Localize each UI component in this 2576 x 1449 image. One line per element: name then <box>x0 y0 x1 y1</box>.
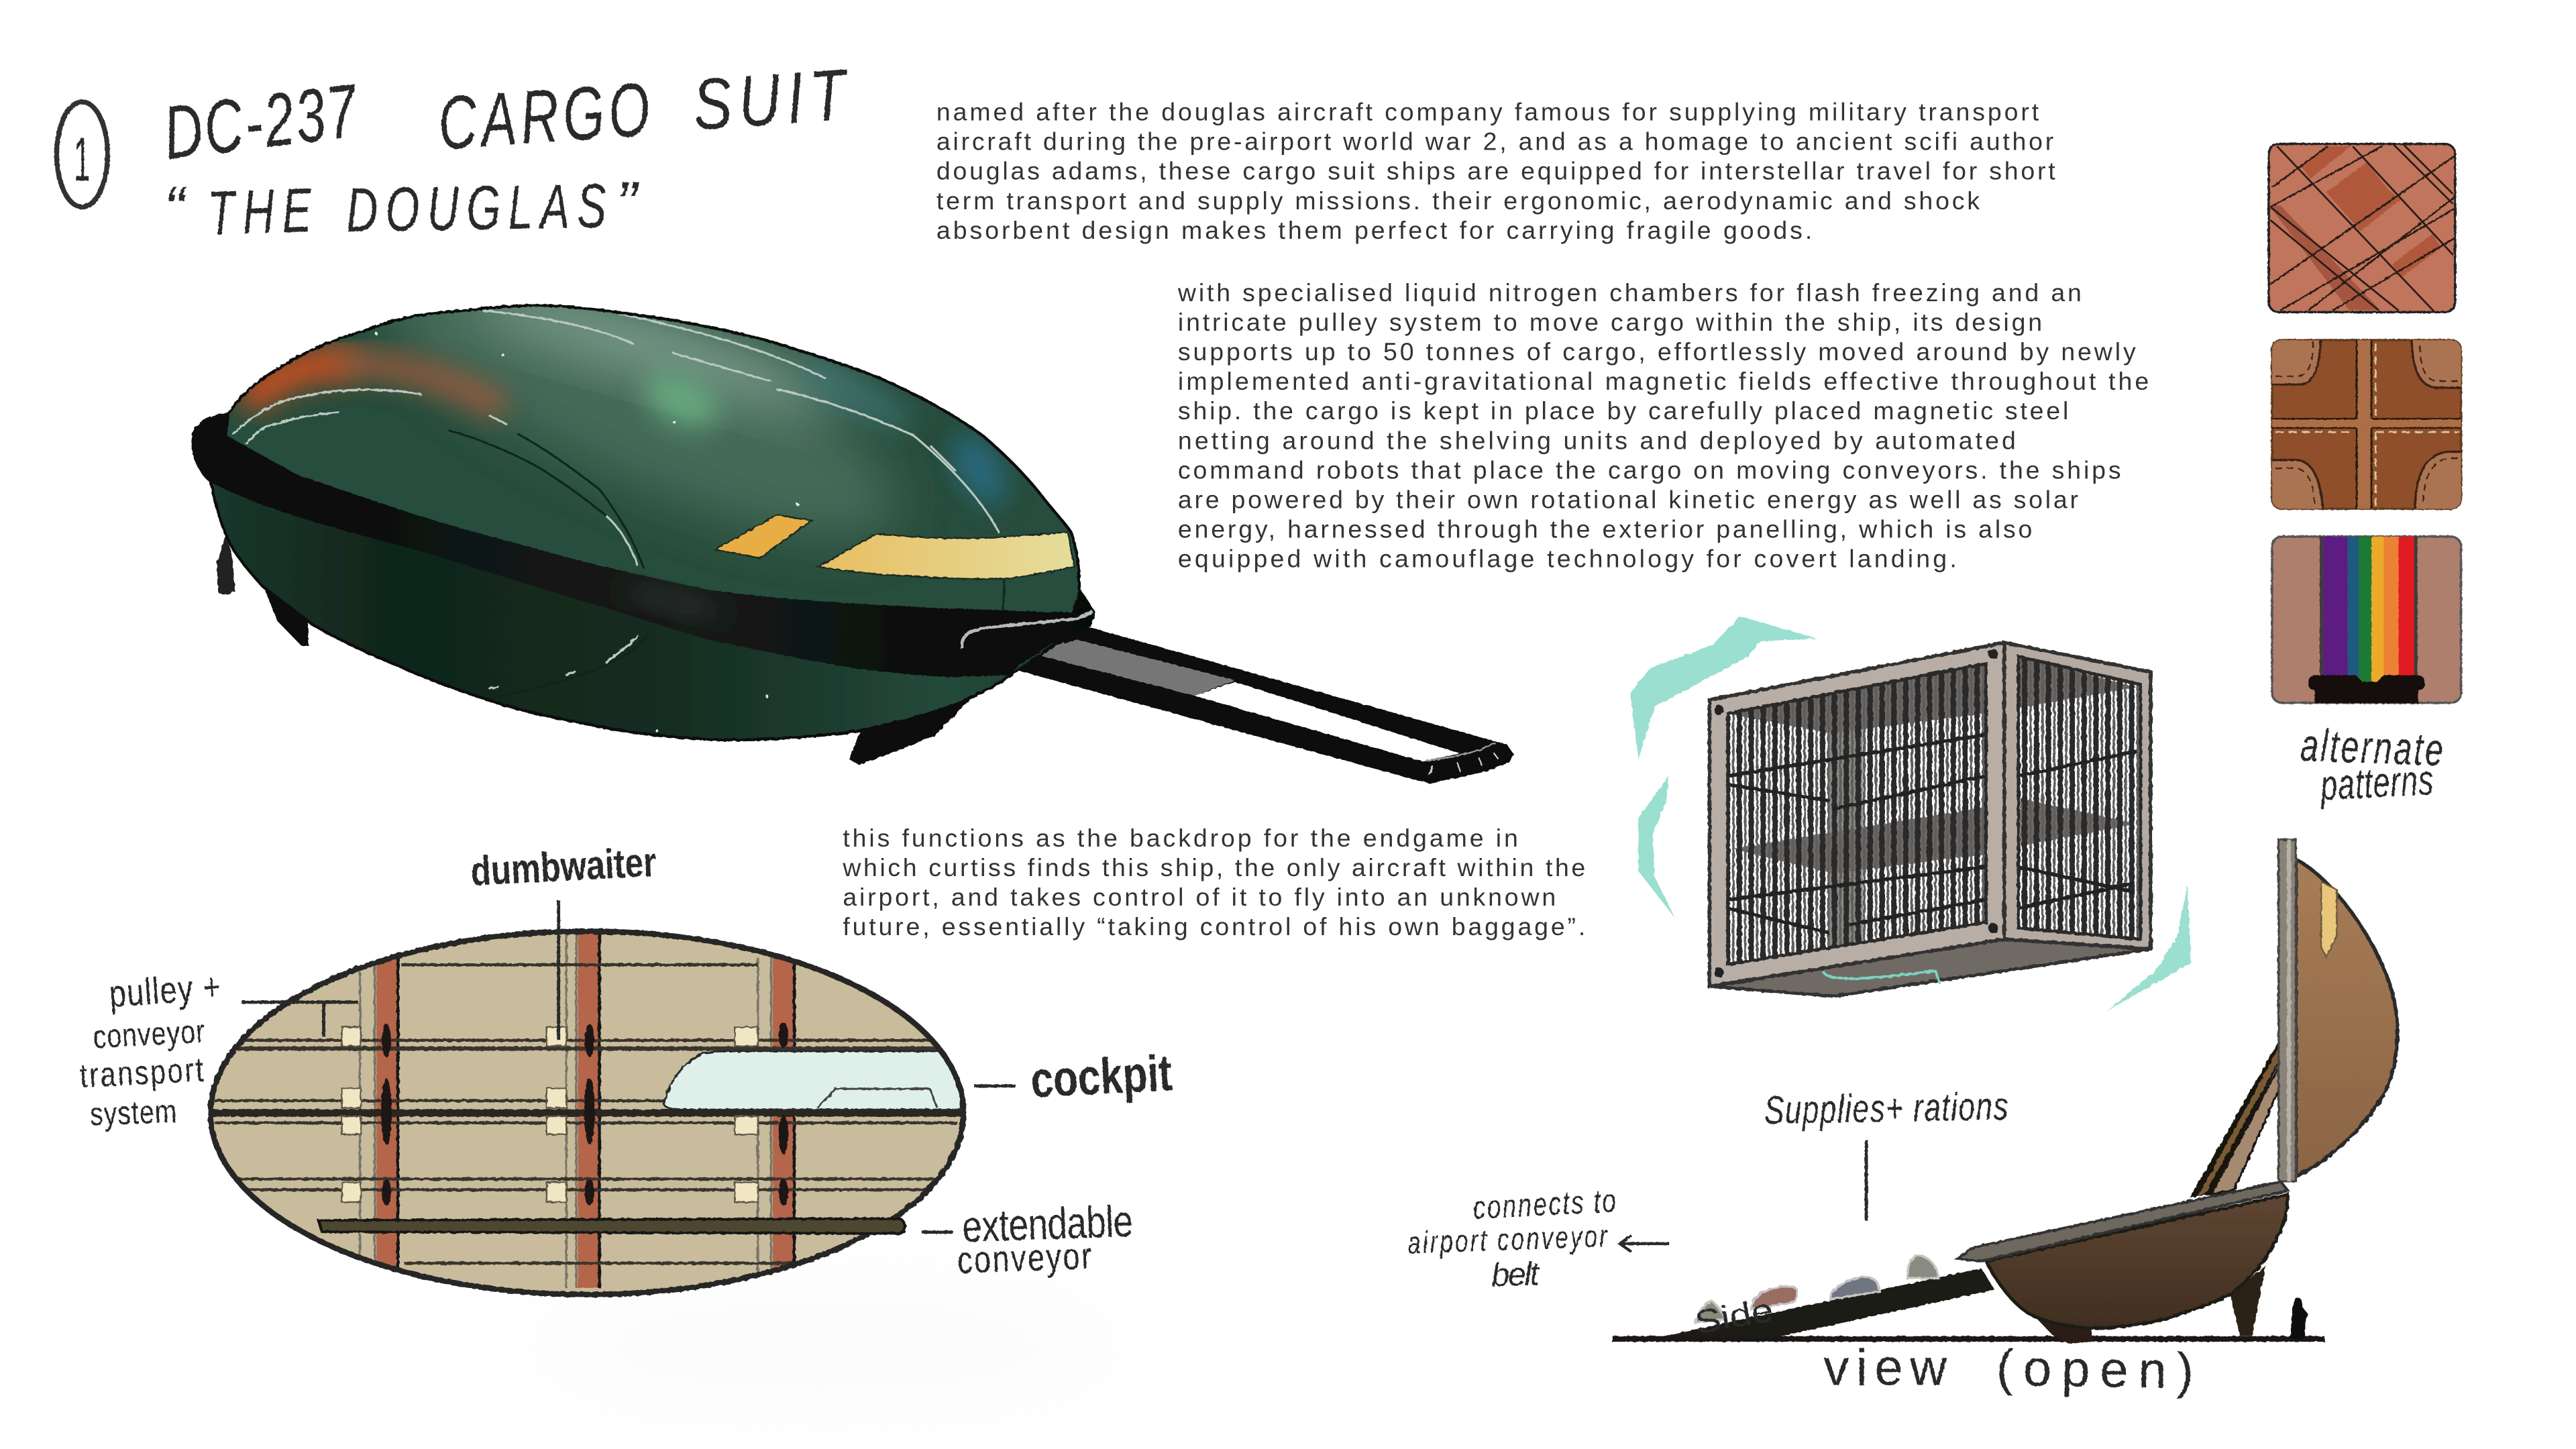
text block: design and cargo systems: supports up to 50 tonnes of cargo, effortlessly moved around by newly <box>1178 337 2136 366</box>
label: alternate patterns: patterns <box>2318 755 2434 810</box>
ship body <box>212 306 1079 739</box>
text block: origin of the name: douglas adams, these cargo suit ships are equipped for interstellar travel for short <box>936 157 2055 185</box>
text block: endgame backdrop: future, essentially “taking control of his own baggage”. <box>843 912 1585 941</box>
title: DC-237 cargo suit "the douglas": DOUGLAS <box>345 171 606 246</box>
lid strut <box>2190 1038 2286 1197</box>
cage bolts <box>1714 649 1998 977</box>
text block: design and cargo systems: energy, harnessed through the exterior panelling, which is also <box>1178 515 2032 543</box>
label: pulley + conveyor transport system: system <box>89 1093 177 1133</box>
text block: origin of the name: absorbent design makes them perfect for carrying fragile goods. <box>936 216 1812 244</box>
labels: cross-section annotations <box>79 839 1173 1281</box>
lower hull <box>1986 1194 2288 1328</box>
cargo supplies <box>1695 1255 1939 1322</box>
label: dumbwaiter: dumbwaiter <box>470 839 657 894</box>
ship yellow window <box>716 515 812 558</box>
ship outline <box>207 305 1079 740</box>
section extendable conveyor <box>319 1219 905 1234</box>
pattern swatch: stitched leather <box>2267 337 2466 511</box>
title: DC-237 cargo suit "the douglas": CARGO <box>435 66 653 166</box>
label: side view (open) <box>1692 1292 2194 1400</box>
label: connects to airport conveyor belt: connects to <box>1472 1183 1617 1226</box>
icon: person for scale <box>2290 1298 2308 1339</box>
text block: endgame backdrop <box>842 824 1585 941</box>
label: pulley + conveyor transport system <box>79 965 222 1133</box>
cage front frame <box>1709 643 2004 986</box>
title: DC-237 cargo suit "the douglas": SUIT <box>690 54 852 146</box>
title: DC-237 cargo suit "the douglas" <box>159 54 852 249</box>
small foot <box>2033 1315 2093 1344</box>
text block: design and cargo systems: intricate pulley system to move cargo within the ship, its design <box>1178 308 2042 336</box>
upper shell <box>2296 859 2398 1176</box>
label: pulley + conveyor transport system: pulley + <box>108 965 222 1015</box>
label: side view (open): Side <box>1692 1292 1776 1341</box>
magnetic field streaks <box>1630 616 2191 1012</box>
hull lid strip <box>1957 1182 2288 1261</box>
support leg <box>2231 1265 2266 1336</box>
label: alternate patterns: alternate <box>2300 718 2444 775</box>
text block: endgame backdrop: this functions as the backdrop for the endgame in <box>843 824 1518 852</box>
title: section number: 1 <box>74 124 91 194</box>
text block: design and cargo systems <box>1177 278 2149 573</box>
label: pulley + conveyor transport system: conveyor <box>92 1014 206 1055</box>
label: cockpit: cockpit <box>1029 1044 1173 1109</box>
label: supplies + rations: Supplies+ rations <box>1764 1085 2008 1133</box>
illustration: side view of the open ship <box>1611 839 2398 1344</box>
section dark pulley slots <box>381 1022 788 1205</box>
pointer line <box>1866 1140 1867 1221</box>
pattern swatch: plaid <box>2269 144 2455 312</box>
label: side view (open): view <box>1823 1339 1947 1396</box>
cage front window <box>1729 665 1985 962</box>
arrow to airport conveyor <box>1620 1236 1669 1252</box>
ship black band <box>191 413 1095 677</box>
ship handle <box>961 626 1514 784</box>
text block: endgame backdrop: which curtiss finds this ship, the only aircraft within the <box>842 853 1585 881</box>
section hull <box>211 931 963 1295</box>
upper shell window <box>2321 882 2337 957</box>
text block: design and cargo systems: command robots that place the cargo on moving conveyors. the ships <box>1178 455 2121 484</box>
illustration: cargo cage with magnetic field <box>1630 616 2191 1012</box>
cage side frame <box>2004 643 2151 949</box>
label: connects to airport conveyor belt <box>1407 1183 1617 1294</box>
title: DC-237 cargo suit "the douglas": DC-237 <box>159 68 364 176</box>
ship connector ring <box>962 611 1093 649</box>
label: alternate patterns <box>2300 718 2444 810</box>
title: section number <box>56 102 107 207</box>
ship fins <box>264 586 976 765</box>
text block: origin of the name: aircraft during the pre-airport world war 2, and as a homage to ancient scifi author <box>936 127 2053 156</box>
text block: origin of the name: term transport and supply missions. their ergonomic, aerodynamic and shock <box>936 186 1980 215</box>
cage underside <box>1709 939 2151 996</box>
text block: design and cargo systems: with specialised liquid nitrogen chambers for flash freezing and an <box>1177 278 2082 307</box>
label: extendable conveyor <box>957 1196 1134 1281</box>
text block: design and cargo systems: ship. the cargo is kept in place by carefully placed magnetic steel <box>1178 396 2068 425</box>
label: side view (open): (open) <box>1996 1340 2194 1400</box>
illustration: green cargo ship with extended handle <box>191 303 1515 784</box>
label: pulley + conveyor transport system: transport <box>79 1050 205 1095</box>
section cream pulleys <box>342 1027 758 1202</box>
label: extendable conveyor: extendable <box>961 1196 1134 1252</box>
cage side window <box>2019 658 2140 938</box>
text block: design and cargo systems: are powered by their own rotational kinetic energy as well as solar <box>1178 485 2078 513</box>
section red columns <box>376 933 794 1288</box>
text block: design and cargo systems: netting around the shelving units and deployed by automated <box>1178 426 2016 454</box>
diagram: internal layout cross-section <box>207 928 967 1298</box>
label: connects to airport conveyor belt: airport conveyor <box>1407 1218 1609 1260</box>
title: DC-237 cargo suit "the douglas": “ <box>163 173 188 244</box>
cargo ramp <box>1662 1269 1994 1338</box>
pointer lines <box>241 900 1015 1232</box>
labels: side view annotations <box>1407 1085 2194 1400</box>
ship yellow stripe <box>818 532 1075 579</box>
text block: endgame backdrop: airport, and takes control of it to fly into an unknown <box>843 883 1556 911</box>
title: DC-237 cargo suit "the douglas": ” <box>616 169 639 239</box>
section cockpit <box>664 1051 974 1110</box>
icon: tiny person for scale <box>217 535 235 595</box>
ground line <box>1611 1338 2324 1340</box>
text block: design and cargo systems: equipped with camouflage technology for covert landing. <box>1178 545 1957 573</box>
shell edge panel <box>2279 839 2296 1181</box>
label: connects to airport conveyor belt: belt <box>1491 1256 1541 1294</box>
text block: design and cargo systems: implemented anti-gravitational magnetic fields effective throughout the <box>1178 367 2149 395</box>
text block: origin of the name <box>936 98 2055 244</box>
title: DC-237 cargo suit "the douglas": THE <box>207 175 313 249</box>
label: extendable conveyor: conveyor <box>957 1234 1092 1281</box>
pattern swatch: rainbow stripe <box>2272 535 2461 703</box>
text block: origin of the name: named after the douglas aircraft company famous for supplying military transport <box>936 98 2039 126</box>
